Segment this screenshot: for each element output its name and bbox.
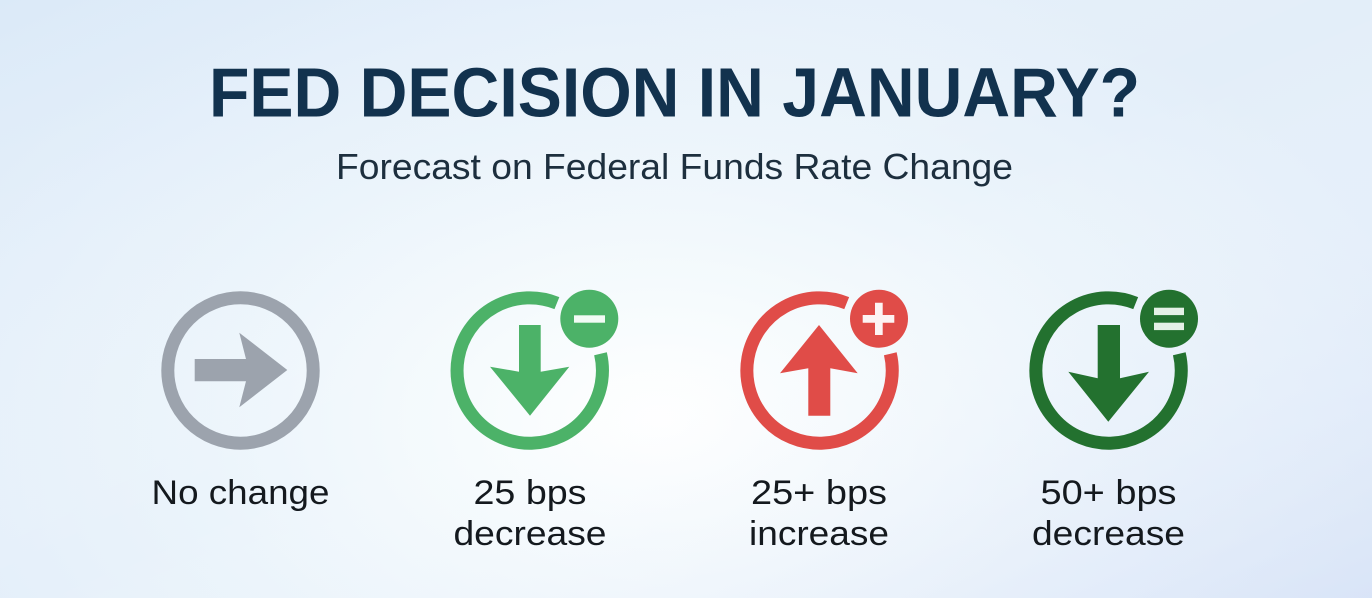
label: 25 bps decrease (454, 474, 606, 553)
label: 50+ bps decrease: 50+ bps (1040, 474, 1176, 512)
icon: red up arrow in ring (747, 290, 908, 443)
label: 50+ bps decrease: decrease (1032, 515, 1185, 553)
label: no change: No change (152, 474, 330, 512)
label: 25+ bps increase (749, 474, 889, 553)
subtitle: Forecast on Federal Funds Rate Change (336, 146, 1013, 187)
label: 25+ bps increase: increase (749, 515, 889, 553)
label: 25 bps decrease: 25 bps (474, 474, 586, 512)
icon: gray right arrow in ring (168, 298, 313, 443)
label: 25+ bps increase: 25+ bps (751, 474, 887, 512)
label: 50+ bps decrease (1032, 474, 1185, 553)
title: FED DECISION IN JANUARY? (209, 54, 1140, 132)
item: no change (152, 298, 330, 512)
item: 50+ bps decrease (1032, 290, 1198, 553)
item: 25 bps decrease (454, 290, 618, 553)
label: 25 bps decrease: decrease (454, 515, 606, 553)
icon: equals sign (1154, 308, 1184, 330)
icon: dark green down arrow in ring (1036, 290, 1198, 443)
icon: green down arrow in ring (457, 290, 618, 443)
item: 25+ bps increase (747, 290, 908, 553)
